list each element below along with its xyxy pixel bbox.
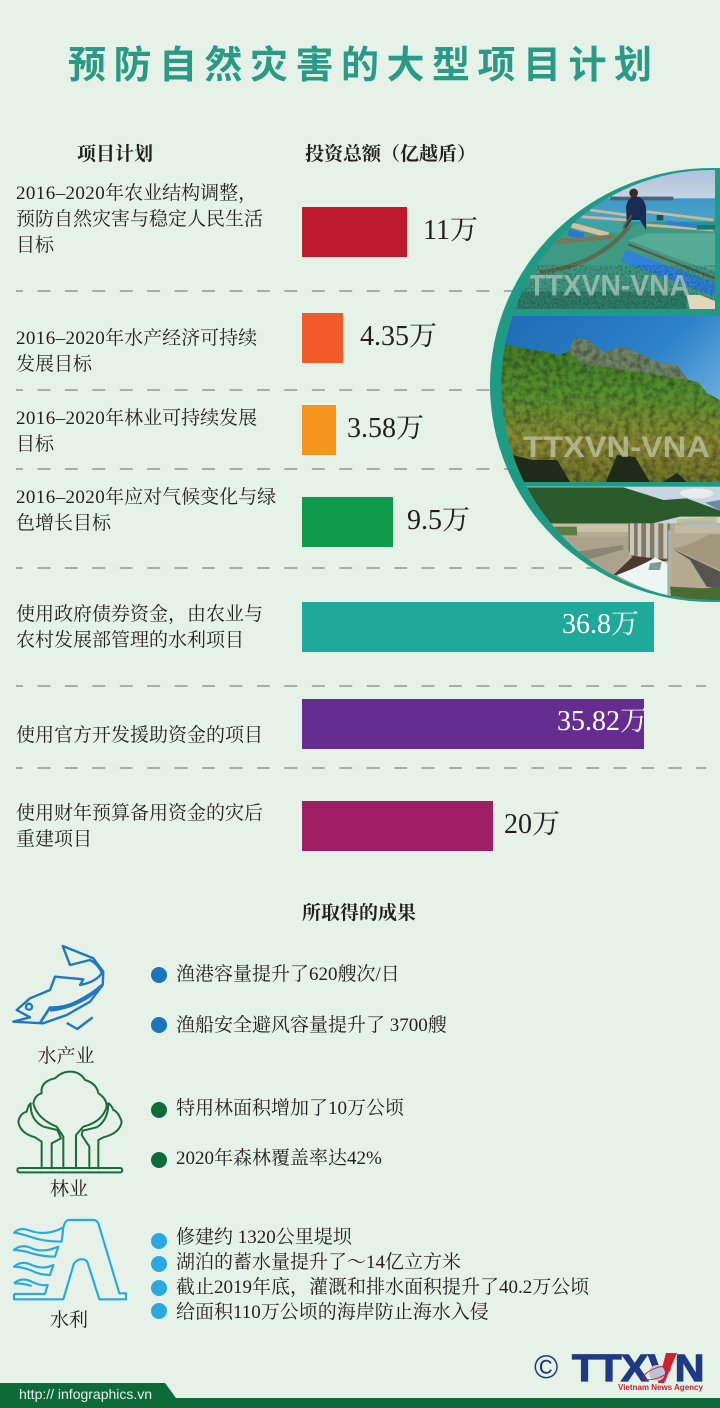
footer bar bbox=[0, 1398, 720, 1408]
row label 1 bbox=[16, 182, 263, 256]
text: 渔船安全避风容量提升了 3700艘 bbox=[176, 1015, 447, 1036]
row label 2: 发展目标 bbox=[16, 354, 92, 375]
copyright symbol: © bbox=[534, 1348, 558, 1385]
photo: forest mountain bbox=[480, 316, 720, 482]
text: 修建约 1320公里堤坝 bbox=[176, 1227, 352, 1248]
row label 4: 2016–2020年应对气候变化与绿 bbox=[16, 487, 276, 508]
row label 3 bbox=[16, 408, 257, 455]
row 2 bbox=[16, 313, 437, 375]
logo wordmark: TTXVN bbox=[572, 1348, 704, 1390]
row label 5: 使用政府债券资金，由农业与 bbox=[16, 604, 263, 625]
value 1: 11万 bbox=[423, 215, 478, 246]
icon: dam bbox=[12, 1218, 128, 1300]
row label 3: 目标 bbox=[16, 434, 54, 455]
bar 3 bbox=[302, 405, 336, 455]
label: water: 水利 bbox=[50, 1310, 88, 1331]
row 1 bbox=[16, 182, 478, 257]
text: 渔港容量提升了620艘次/日 bbox=[176, 964, 400, 985]
bullet bbox=[151, 1303, 167, 1319]
row label 7: 重建项目 bbox=[16, 829, 92, 850]
bullet bbox=[151, 1280, 167, 1296]
row label 1: 目标 bbox=[16, 235, 54, 256]
row label 5: 农村发展部管理的水利项目 bbox=[16, 630, 244, 651]
bar 6 bbox=[302, 699, 644, 749]
row 5 bbox=[16, 602, 654, 652]
row 3 bbox=[16, 405, 424, 455]
column heading: projects: 项目计划 bbox=[77, 144, 153, 165]
bullet list: water bbox=[151, 1227, 589, 1323]
text: 湖泊的蓄水量提升了～14亿立方米 bbox=[176, 1252, 461, 1273]
photo circle bbox=[490, 168, 720, 602]
footer url: http:// infographics.vn bbox=[19, 1386, 152, 1402]
bullet list: fisheries bbox=[151, 964, 447, 1036]
label: fisheries: 水产业 bbox=[37, 1046, 94, 1067]
row label 7: 使用财年预算备用资金的灾后 bbox=[16, 803, 263, 824]
bullet list: forestry bbox=[151, 1098, 404, 1169]
row 7 bbox=[16, 801, 560, 851]
row label 2: 2016–2020年水产经济可持续 bbox=[16, 328, 257, 349]
row 6 bbox=[16, 699, 648, 749]
bullet bbox=[151, 1102, 167, 1118]
value 4: 9.5万 bbox=[407, 505, 470, 536]
photo: dam bbox=[526, 486, 720, 600]
value 2: 4.35万 bbox=[360, 321, 437, 352]
text: 给面积110万公顷的海岸防止海水入侵 bbox=[176, 1302, 489, 1323]
text: 截止2019年底，灌溉和排水面积提升了40.2万公顷 bbox=[176, 1277, 589, 1298]
row 4 bbox=[16, 486, 470, 547]
row label 1: 2016–2020年农业结构调整， bbox=[16, 183, 257, 204]
footer url tab bbox=[0, 1383, 176, 1398]
row label 1: 预防自然灾害与稳定人民生活 bbox=[16, 209, 263, 230]
logo subtitle: Vietnam News Agency bbox=[618, 1383, 703, 1392]
row label 7 bbox=[16, 802, 263, 850]
icon: tree bbox=[16, 1070, 124, 1174]
bar 1 bbox=[302, 207, 407, 257]
bullet bbox=[151, 1017, 167, 1033]
text: 特用林面积增加了10万公顷 bbox=[176, 1098, 404, 1119]
title: 预防自然灾害的大型项目计划 bbox=[68, 34, 660, 89]
logo red accent and globe bbox=[643, 1353, 677, 1383]
column heading: investment: 投资总额（亿越盾） bbox=[305, 144, 476, 165]
icon: fish bbox=[12, 944, 104, 1030]
row label 4: 色增长目标 bbox=[16, 513, 111, 534]
bullet bbox=[151, 1152, 167, 1168]
results heading: 所取得的成果 bbox=[302, 903, 416, 924]
bullet bbox=[151, 967, 167, 983]
text: 2020年森林覆盖率达42% bbox=[176, 1148, 382, 1169]
label: forestry: 林业 bbox=[50, 1179, 88, 1200]
watermark: TTXVN-VNA bbox=[528, 270, 690, 303]
photo: fish farm bbox=[514, 170, 715, 312]
row label 6: 使用官方开发援助资金的项目 bbox=[16, 725, 263, 746]
row label 4 bbox=[16, 486, 276, 534]
row label 5 bbox=[16, 604, 263, 651]
row label 3: 2016–2020年林业可持续发展 bbox=[16, 408, 257, 429]
watermark: TTXVN-VNA bbox=[523, 431, 710, 464]
bullet bbox=[151, 1233, 167, 1249]
value 7: 20万 bbox=[504, 809, 560, 840]
bar 5 bbox=[302, 602, 654, 652]
bar 7 bbox=[302, 801, 493, 851]
value 5: 36.8万 bbox=[562, 609, 639, 640]
row label 2 bbox=[16, 328, 257, 375]
bar 2 bbox=[302, 313, 343, 363]
logo: TTXVN bbox=[572, 1348, 704, 1392]
value 6: 35.82万 bbox=[557, 706, 648, 737]
value 3: 3.58万 bbox=[347, 413, 424, 444]
bar 4 bbox=[302, 497, 393, 547]
bullet bbox=[151, 1256, 167, 1272]
